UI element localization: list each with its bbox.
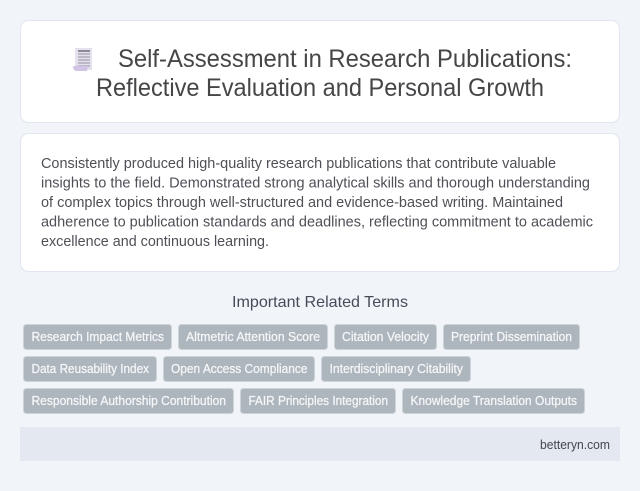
footer bar — [20, 427, 620, 461]
tag: Responsible Authorship Contribution — [32, 393, 226, 408]
title text — [96, 45, 572, 102]
footer source: betteryn.com — [540, 437, 610, 452]
tag: FAIR Principles Integration — [248, 393, 388, 408]
title text: Reflective Evaluation and Personal Growth — [96, 74, 544, 102]
tag — [178, 324, 328, 350]
tag — [24, 388, 234, 414]
summary text: adherence to publication standards and deadlines, reflecting commitment to academic — [41, 214, 593, 230]
tag — [402, 388, 584, 414]
summary text: Consistently produced high-quality research publications that contribute valuable — [41, 155, 556, 172]
tag: Data Reusability Index — [32, 361, 149, 376]
tag — [240, 388, 396, 414]
summary text: insights to the field. Demonstrated strong analytical skills and thorough understanding — [41, 174, 590, 192]
tag: Open Access Compliance — [171, 361, 308, 376]
summary text: of complex topics through well-structured and evidence-based writing. Maintained — [41, 194, 563, 211]
title text: Self-Assessment in Research Publications: — [118, 45, 572, 73]
tag — [24, 356, 156, 382]
summary text — [41, 155, 593, 250]
summary text: excellence and continuous learning. — [41, 233, 269, 250]
panel: title card — [20, 20, 620, 122]
tag: Knowledge Translation Outputs — [410, 393, 577, 408]
tag: Interdisciplinary Citability — [330, 361, 463, 376]
tag — [164, 356, 314, 382]
panel: summary card — [20, 134, 620, 272]
tag — [334, 324, 436, 350]
tag — [322, 356, 470, 382]
tags: related terms — [24, 324, 584, 414]
tag — [24, 324, 172, 350]
tag: Research Impact Metrics — [32, 329, 164, 344]
icon: document scroll — [73, 48, 92, 71]
tag: Citation Velocity — [342, 329, 429, 344]
tag: Preprint Dissemination — [451, 329, 572, 344]
tag: Altmetric Attention Score — [186, 329, 320, 344]
tag — [444, 324, 580, 350]
heading: related terms: Important Related Terms — [232, 294, 408, 311]
